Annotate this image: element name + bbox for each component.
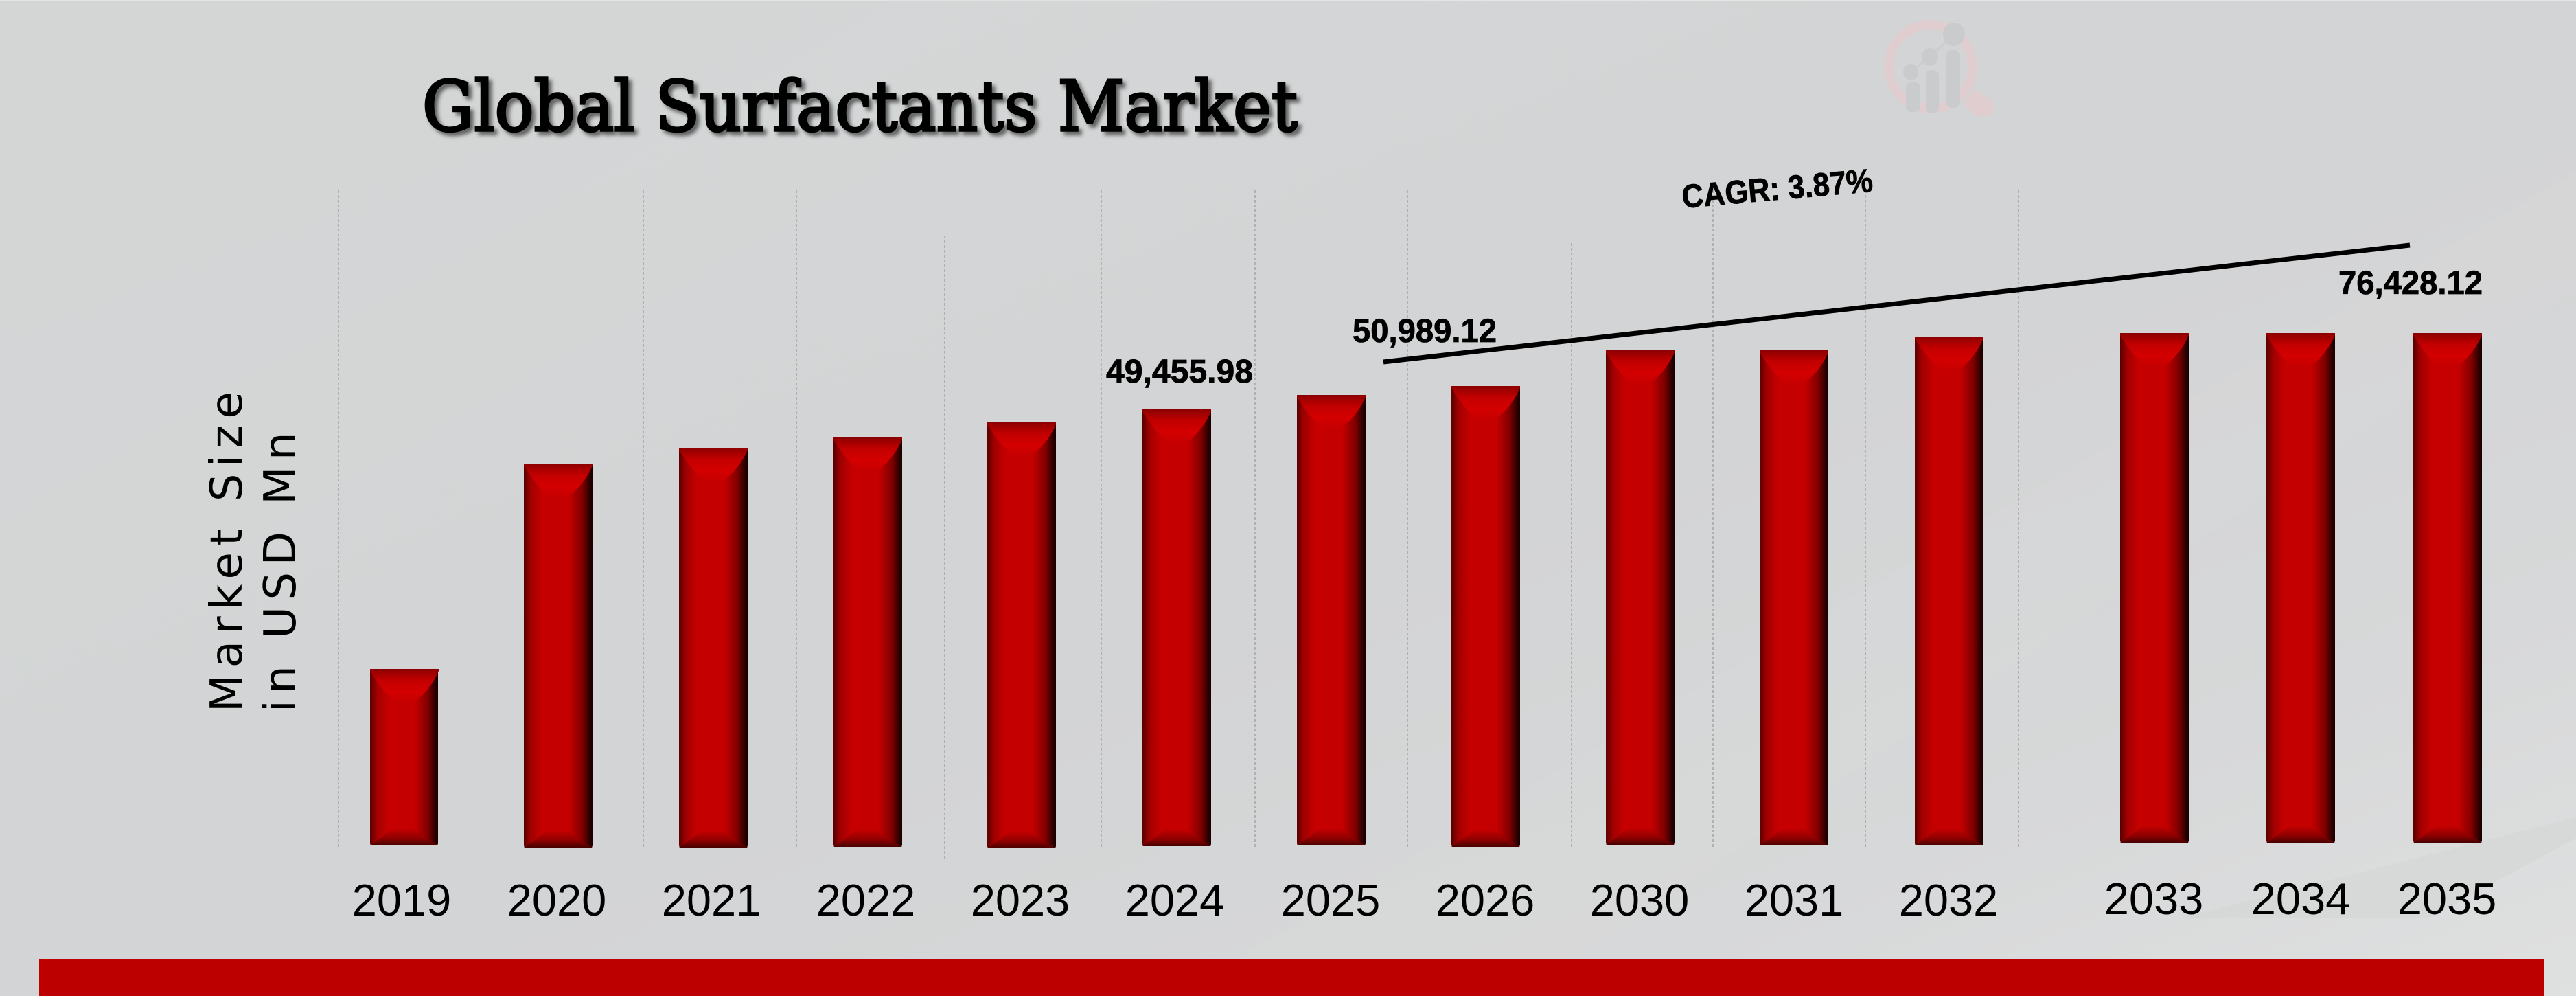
bar: 2025 — [1297, 395, 1366, 845]
CAGR label: CAGR: 3.87% — [1680, 163, 1874, 216]
bar: 2019 — [370, 669, 439, 845]
bar: 2031 — [1760, 350, 1828, 845]
x-axis year labels: 2032 — [1899, 875, 1998, 925]
footer band — [0, 959, 2576, 1000]
title: Global Surfactants Market — [422, 66, 1298, 147]
x-axis year labels: 2031 — [1745, 875, 1843, 925]
bar: 2030 — [1606, 350, 1675, 845]
x-axis year labels: 2021 — [662, 875, 761, 925]
bar: 2022 — [833, 438, 902, 847]
bar: 2021 — [679, 448, 748, 848]
y-axis title — [202, 385, 306, 712]
bar: 2035 — [2413, 333, 2482, 843]
x-axis year labels — [352, 874, 2496, 925]
x-axis year labels: 2030 — [1590, 875, 1689, 925]
bar: 2020 — [524, 464, 593, 848]
x-axis year labels: 2035 — [2397, 874, 2496, 924]
bar: 2024 — [1142, 409, 1211, 846]
bar: 2032 — [1915, 337, 1983, 845]
icon: faded magnifier logo — [1889, 23, 1993, 117]
x-axis year labels: 2033 — [2104, 874, 2203, 924]
x-axis year labels: 2019 — [352, 875, 451, 925]
x-axis year labels: 2026 — [1436, 875, 1534, 925]
x-axis year labels: 2023 — [971, 875, 1070, 925]
bar chart — [370, 333, 2482, 848]
x-axis year labels: 2025 — [1281, 875, 1380, 925]
y-axis title: in USD Mn — [255, 426, 306, 712]
x-axis year labels: 2020 — [507, 875, 606, 925]
x-axis year labels: 2034 — [2251, 874, 2350, 924]
bar: 2034 — [2266, 333, 2335, 843]
value label: 2035: 76,428.12 — [2338, 265, 2483, 302]
bar: 2033 — [2120, 333, 2189, 843]
bar: 2026 — [1451, 386, 1520, 847]
arrow: CAGR trend line — [1383, 245, 2410, 362]
x-axis year labels: 2024 — [1125, 875, 1224, 925]
value label: 2025: 50,989.12 — [1353, 313, 1497, 350]
value label: 2024: 49,455.98 — [1106, 354, 1253, 390]
x-axis year labels: 2022 — [816, 875, 915, 925]
bar: 2023 — [987, 422, 1056, 848]
y-axis title: Market Size — [202, 385, 253, 712]
